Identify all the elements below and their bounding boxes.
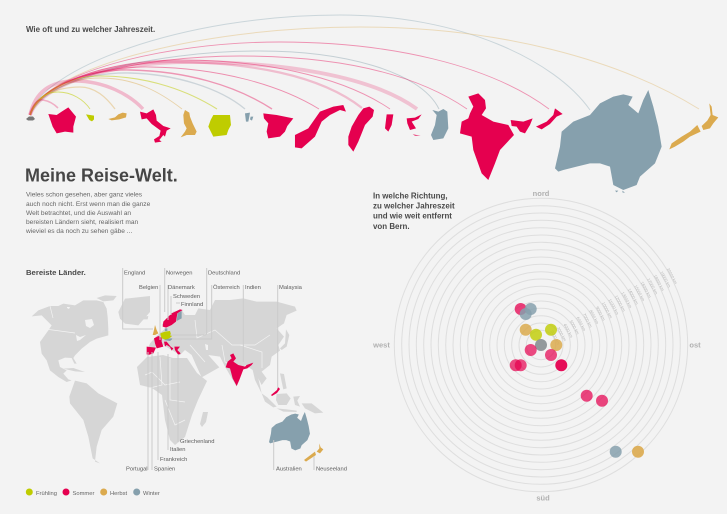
radial chart: distance labels: 3000 km (556, 326, 568, 343)
radial chart: distance labels: 18000 km (653, 274, 666, 292)
silhouette: India (460, 93, 514, 180)
map country labels: Deutschland (208, 270, 240, 276)
heading: direction, season, distance: von Bern. (373, 222, 410, 231)
silhouette: Denmark (245, 113, 253, 122)
map country labels: Portugal (126, 466, 148, 472)
radial chart: distance labels: 16000 km (640, 281, 653, 299)
silhouette: Sweden (348, 107, 374, 152)
intro text: auch noch nicht. Erst wenn man die ganze (26, 201, 151, 208)
map country labels: Finnland (181, 302, 203, 308)
radial chart: destination dots (510, 303, 644, 458)
silhouette: Norway (295, 105, 346, 148)
intro text: wieviel es da noch zu sehen gäbe ... (25, 228, 132, 235)
silhouette: France (48, 107, 76, 133)
heading: direction, season, distance: und wie weit entfernt (373, 212, 452, 220)
map country labels (124, 270, 347, 472)
map country labels: Frankreich (160, 457, 187, 463)
radial chart: distance labels (550, 267, 679, 346)
radial chart: distance labels: 20000 km (666, 267, 679, 285)
radial chart: distance labels: 2000 km (550, 330, 561, 346)
map country labels: Australien (276, 466, 302, 472)
silhouette: Italy (140, 109, 171, 143)
silhouette: Malaysia peninsula (536, 108, 563, 129)
map: lakes (67, 307, 208, 350)
silhouette: Greece (407, 114, 422, 136)
intro text: bereisten Ländern sieht, realisiert man (26, 219, 138, 226)
map country labels: Österreich (213, 284, 240, 291)
map country labels: Neuseeland (316, 466, 347, 472)
silhouette: Spain (263, 113, 293, 138)
map country labels: Italien (170, 447, 185, 453)
radial chart: compass labels (372, 189, 701, 502)
radial chart: distance labels: 4000 km (563, 323, 574, 339)
radial chart: compass labels: süd (536, 494, 550, 502)
legend: Herbst (110, 491, 127, 497)
silhouette: Portugal (385, 114, 393, 132)
radial chart: distance rings (394, 198, 688, 492)
radial chart: compass labels: west (372, 340, 390, 350)
radial chart: distance labels: 19000 km (659, 270, 672, 289)
map country labels: Griechenland (180, 439, 214, 445)
radial chart: distance labels: 13000 km (620, 291, 633, 309)
radial chart: distance labels: 9000 km (595, 306, 607, 322)
silhouette: Germany (208, 115, 231, 137)
radial chart: compass labels: ost (689, 340, 701, 350)
legend (26, 488, 160, 497)
map: grey landmasses (32, 295, 323, 463)
radial chart: distance labels: 7000 km (582, 312, 594, 329)
heading: direction, season, distance: In welche Richtung, (373, 192, 448, 200)
silhouette: England (181, 110, 197, 137)
map: coloured countries (147, 309, 323, 462)
legend: Sommer (72, 491, 94, 497)
silhouette: New Zealand (669, 103, 718, 149)
country silhouettes row (26, 90, 718, 193)
radial chart: distance labels: 8000 km (588, 309, 600, 325)
map country labels: Schweden (173, 294, 200, 300)
silhouette: Finland (431, 109, 448, 140)
world map (32, 295, 323, 463)
radial chart: distance labels: 14000 km (627, 287, 640, 306)
map country labels: Norwegen (166, 270, 192, 276)
legend: Winter (143, 491, 160, 497)
radial chart: distance labels: 11000 km (607, 298, 620, 316)
map country labels: Dänemark (168, 285, 195, 291)
silhouette: Belgium (86, 114, 94, 121)
radial chart: distance labels: 17000 km (646, 277, 659, 296)
legend: Frühling (36, 491, 57, 497)
silhouette: Austria (108, 113, 127, 120)
radial chart: distance labels: 15000 km (633, 284, 646, 303)
heading: visited countries: Bereiste Länder. (26, 268, 86, 277)
map country labels: Indien (245, 285, 261, 291)
map: lakes and borders (45, 306, 270, 425)
intro text: Vieles schon gesehen, aber ganz vieles (26, 192, 143, 198)
map country labels: Malaysia (279, 285, 303, 291)
intro text: Welt betrachtet, und die Auswahl an (26, 210, 131, 217)
chart: arcs from Bern to each country (30, 15, 699, 115)
radial chart: distance labels: 12000 km (614, 294, 627, 313)
map leader lines (123, 268, 314, 470)
heading: direction, season, distance: zu welcher Jahreszeit (373, 202, 455, 210)
radial chart: distance labels: 5000 km (569, 319, 581, 336)
radial chart: distance labels: 6000 km (575, 316, 587, 332)
radial chart: compass labels: nord (533, 189, 550, 198)
icon: Bern (26, 116, 35, 120)
map country labels: Belgien (139, 285, 158, 291)
map country labels: Spanien (154, 466, 175, 472)
map country labels: England (124, 270, 145, 276)
radial chart: distance labels: 10000 km (601, 301, 614, 320)
silhouette: Australia (555, 90, 662, 193)
title: Meine Reise-Welt. (25, 166, 178, 186)
silhouette: Malaysia (511, 118, 533, 133)
heading: how often and in which season: Wie oft und zu welcher Jahreszeit. (26, 25, 155, 34)
